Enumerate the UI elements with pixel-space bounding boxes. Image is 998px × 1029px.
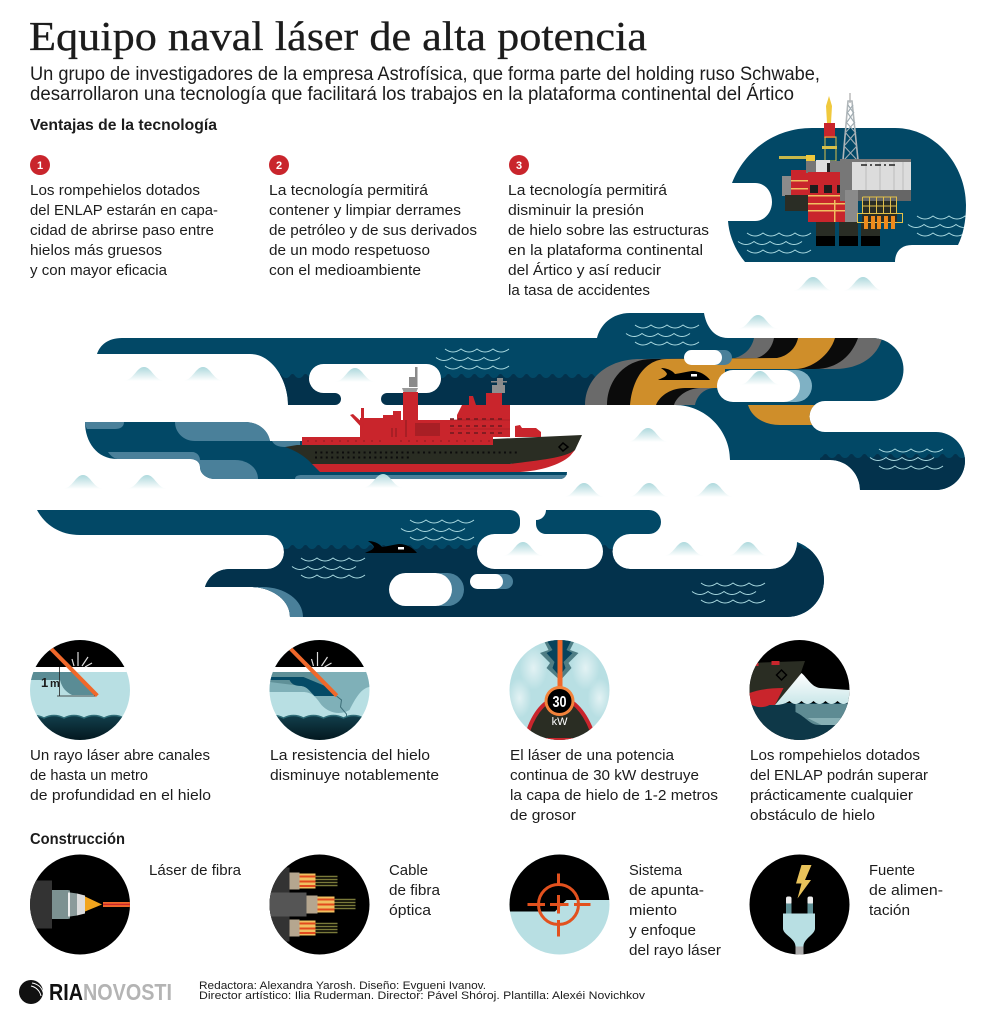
icon: icebreaker over ice — [750, 640, 850, 743]
icon: 30 kW laser: 30 — [552, 694, 567, 711]
icon: fiber laser — [30, 854, 130, 954]
advantage 2: de un modo respetuoso — [269, 242, 430, 259]
advantage 3: del Ártico y así reducir — [508, 262, 661, 279]
icon: 30 kW laser: kW — [552, 716, 568, 728]
sea and ice scene — [37, 313, 970, 621]
label: targeting system — [629, 862, 721, 959]
text: ice resistance: La resistencia del hielo — [270, 747, 430, 764]
label: targeting system: y enfoque — [629, 922, 696, 939]
logo: RIA Novosti — [19, 979, 172, 1005]
advantage 3: disminuir la presión — [508, 202, 644, 219]
credits: Director artístico: Ilia Ruderman. Director: Pável Shóroj. Plantilla: Alexéi Novichkov — [199, 990, 646, 1002]
icon: power plug — [750, 854, 850, 956]
label: fiber optic cable: Cable — [389, 862, 428, 879]
advantage 2: 2 — [276, 160, 282, 172]
subtitle: desarrollaron una tecnología que facilitará los trabajos en la plataforma continental del Ártico — [30, 84, 794, 105]
text: icebreakers — [750, 747, 928, 824]
label: fiber laser: Láser de fibra — [149, 862, 242, 879]
advantage 1: del ENLAP estarán en capa- — [30, 202, 218, 219]
advantage 1: Los rompehielos dotados — [30, 182, 200, 199]
platform structure — [779, 93, 911, 246]
text: laser channels: de hasta un metro — [30, 767, 148, 784]
oil slick — [585, 338, 882, 425]
label: fiber optic cable — [389, 862, 441, 919]
text: icebreakers: prácticamente cualquier — [750, 787, 913, 804]
label: power source: de alimen- — [869, 882, 943, 899]
credits — [199, 980, 646, 1002]
icon: targeting reticle — [510, 854, 610, 954]
advantage 1: y con mayor eficacia — [30, 262, 168, 279]
text: icebreakers: obstáculo de hielo — [750, 807, 875, 824]
advantage 2: de petróleo y de sus derivados — [269, 222, 477, 239]
advantage 3: en la plataforma continental — [508, 242, 703, 259]
subtitle: Un grupo de investigadores de la empresa Astrofísica, que forma parte del holding ruso Schwabe, — [30, 64, 820, 85]
label: fiber optic cable: de fibra — [389, 882, 441, 899]
upper water band — [97, 313, 970, 494]
icon: ice resistance decreases — [270, 640, 370, 740]
text: icebreakers: Los rompehielos dotados — [750, 747, 920, 764]
text: 30 kW — [510, 747, 718, 824]
credits: Redactora: Alexandra Yarosh. Diseño: Evgueni Ivanov. — [199, 980, 486, 992]
label: targeting system: de apunta- — [629, 882, 704, 899]
oil platform scene — [728, 93, 981, 262]
icon: fiber optic cable — [270, 854, 370, 954]
icon: laser cuts ice channel: 1 — [41, 675, 48, 690]
text: ice resistance: disminuye notablemente — [270, 767, 439, 784]
advantage 1 — [30, 155, 218, 279]
heading: construction: Construcción — [30, 831, 125, 848]
label: power source: tación — [869, 902, 910, 919]
text: laser channels — [30, 747, 211, 804]
advantage 2: contener y limpiar derrames — [269, 202, 461, 219]
advantage 1: 1 — [37, 160, 43, 172]
lower orca — [365, 541, 417, 553]
text: laser channels: de profundidad en el hielo — [30, 787, 211, 804]
heading: advantages: Ventajas de la tecnología — [30, 117, 217, 134]
icon: laser cuts ice channel — [30, 640, 130, 740]
advantage 3: la tasa de accidentes — [508, 282, 650, 299]
advantage 3: de hielo sobre las estructuras — [508, 222, 709, 239]
subtitle — [30, 64, 820, 105]
text: 30 kW: la capa de hielo de 1-2 metros — [510, 787, 718, 804]
advantage 2: La tecnología permitirá — [269, 182, 429, 199]
ice mountains — [61, 315, 782, 556]
logo: RIA Novosti: RIA — [49, 979, 83, 1005]
text: 30 kW: de grosor — [510, 807, 576, 824]
advantage 3: La tecnología permitirá — [508, 182, 668, 199]
icebreaker ship — [285, 367, 582, 472]
text: 30 kW: El láser de una potencia — [510, 747, 675, 764]
text: 30 kW: continua de 30 kW destruye — [510, 767, 699, 784]
logo: RIA Novosti: NOVOSTI — [83, 979, 172, 1005]
advantage 2: con el medioambiente — [269, 262, 421, 279]
icon: laser cuts ice channel: m — [50, 678, 60, 690]
mountains under platform — [791, 277, 885, 291]
orca in oil — [658, 368, 710, 380]
label: fiber optic cable: óptica — [389, 902, 432, 919]
label: targeting system: Sistema — [629, 862, 683, 879]
lower water band — [37, 508, 830, 621]
label: power source: Fuente — [869, 862, 915, 879]
label: power source — [869, 862, 943, 919]
text: ice resistance — [270, 747, 439, 784]
icon: 30 kW laser — [508, 640, 612, 740]
text: laser channels: Un rayo láser abre canales — [30, 747, 210, 764]
advantage 1: hielos más gruesos — [30, 242, 162, 259]
middle water band — [85, 422, 567, 479]
cloud in upper water — [294, 364, 450, 407]
advantage 3 — [508, 155, 709, 299]
label: targeting system: del rayo láser — [629, 942, 721, 959]
text: icebreakers: del ENLAP podrán superar — [750, 767, 928, 784]
advantage 1: cidad de abrirse paso entre — [30, 222, 214, 239]
title: Equipo naval láser de alta potencia — [29, 13, 647, 59]
advantage 3: 3 — [516, 160, 522, 172]
label: targeting system: miento — [629, 902, 677, 919]
ice pills in oil — [684, 350, 812, 402]
advantage 2 — [269, 155, 477, 279]
